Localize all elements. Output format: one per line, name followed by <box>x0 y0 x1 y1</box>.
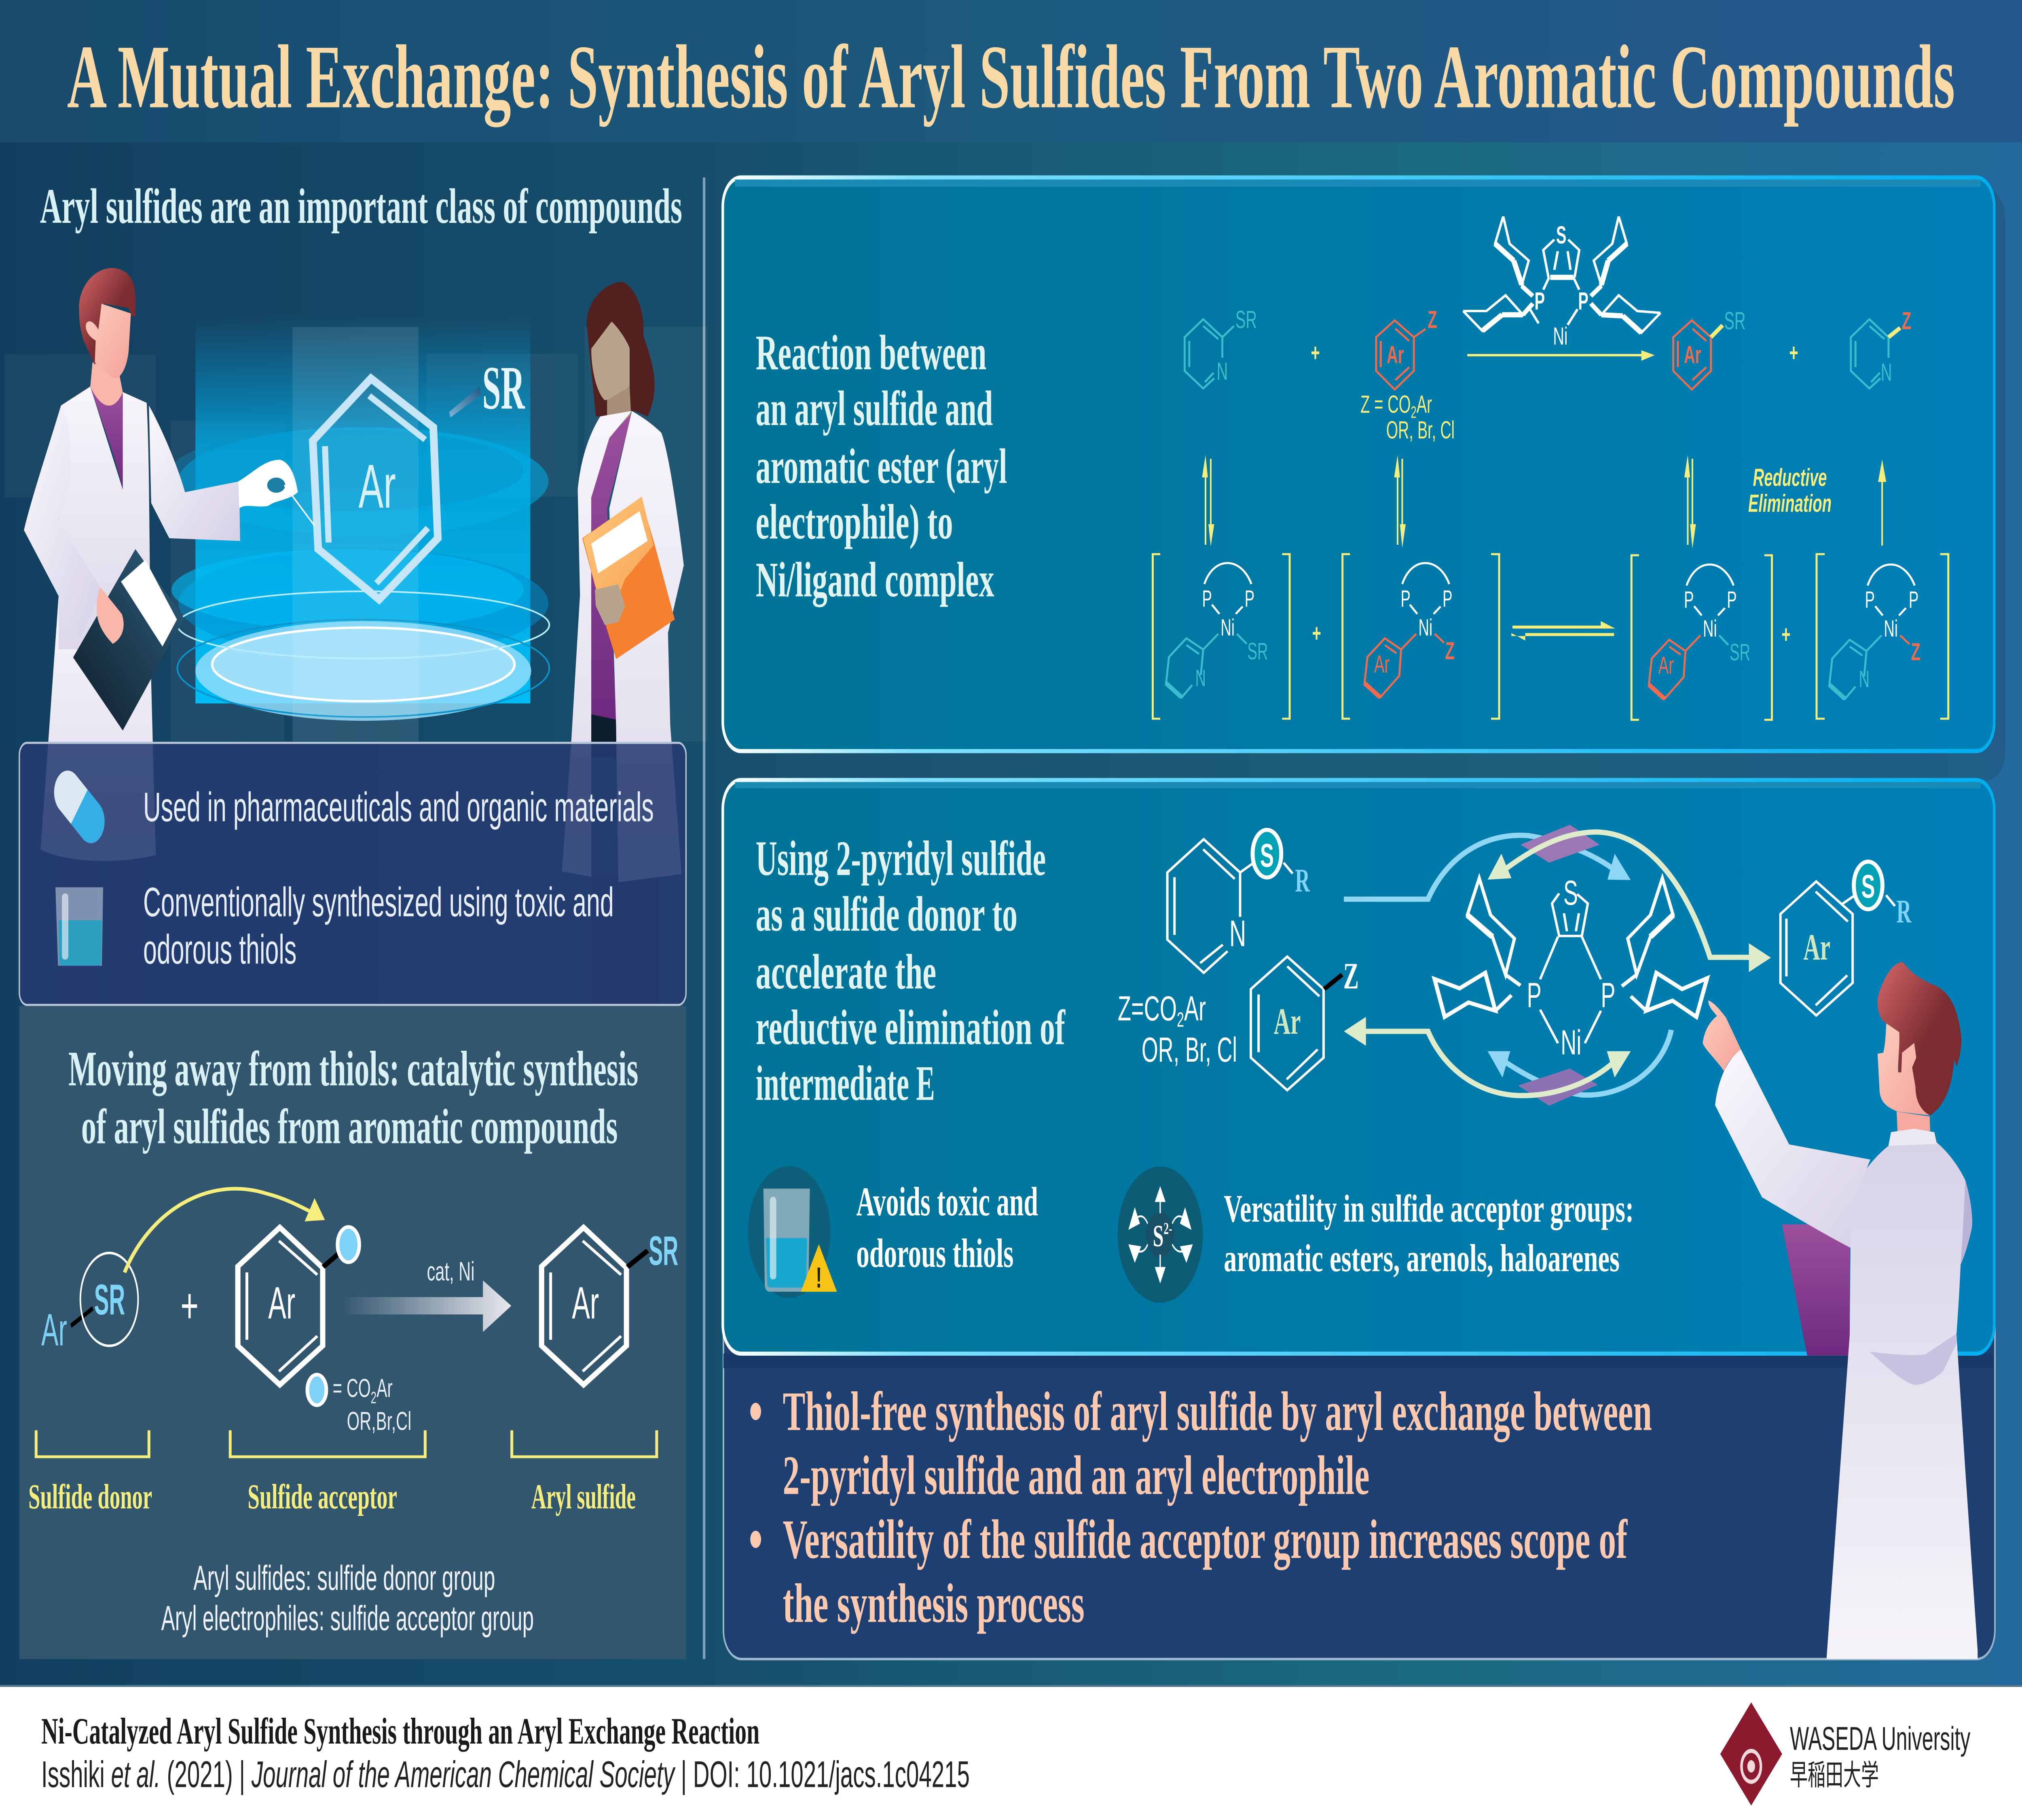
text: strategy description: intermediate E <box>756 1056 935 1111</box>
complexes: Ni intermediates with brackets: + <box>1781 620 1791 648</box>
reagent: aryl electrophile: Z <box>1428 306 1437 333</box>
text: versatility <box>1224 1187 1634 1280</box>
complexes: Ni intermediates with brackets: + <box>1312 620 1321 647</box>
figure: scientist pointing <box>1703 962 1978 1659</box>
aryl sulfide product structure: Ar <box>572 1277 599 1328</box>
catalytic exchange diagram: Ar <box>1274 1001 1301 1042</box>
arrow: catalyst reaction arrow: cat, Ni <box>427 1256 474 1286</box>
heading: Moving away from thiols: catalytic synthesis <box>68 1042 638 1096</box>
catalytic exchange diagram: Z=CO <box>1118 989 1177 1028</box>
catalytic exchange diagram: S <box>1563 874 1578 912</box>
complexes: Ni intermediates with brackets: Z <box>1911 638 1920 666</box>
reagent: aryl electrophile: Ar <box>1417 390 1432 418</box>
complexes: Ni intermediates with brackets: P <box>1727 587 1737 613</box>
icon: sulfide dianion with arrows: 2- <box>1163 1220 1172 1238</box>
arrow: forward reaction with ligand: P <box>1578 287 1588 315</box>
citation details: Isshiki et al. (2021) | Journal of the American Chemical Society | DOI: 10.1021/jacs.1c04215 <box>41 1754 970 1795</box>
catalytic exchange diagram: 2 <box>1177 1008 1184 1031</box>
labels: donor, acceptor, product: Sulfide acceptor <box>247 1477 397 1516</box>
labels: donor, acceptor, product: Sulfide donor <box>28 1477 152 1516</box>
heading: of aryl sulfides from aromatic compounds <box>81 1100 618 1154</box>
product: aryl sulfide <box>1673 307 1746 389</box>
text: reaction description <box>756 326 1007 607</box>
text: bullet one: Thiol-free synthesis of aryl sulfide by aryl exchange between <box>783 1380 1652 1442</box>
text: group definitions <box>161 1559 534 1638</box>
reagent: aryl electrophile <box>1360 306 1455 444</box>
figure: female scientist <box>562 282 684 1007</box>
complexes: Ni intermediates with brackets: Ar <box>1658 652 1674 679</box>
title: A Mutual Exchange: Synthesis of Aryl Sulfides From Two Aromatic Compounds <box>67 27 1955 127</box>
catalytic exchange diagram: P <box>1527 976 1542 1015</box>
complexes: Ni intermediates with brackets: Ni <box>1220 615 1235 641</box>
icon: beaker <box>55 887 103 966</box>
plus sign: + <box>1311 339 1320 366</box>
pyridyl sulfide structure <box>1168 830 1292 973</box>
text: conventional synthesis: Conventionally synthesized using toxic and <box>143 879 614 925</box>
text: reaction description: electrophile) to <box>756 495 953 550</box>
complexes: Ni intermediates with brackets: N <box>1859 666 1870 692</box>
complexes: Ni intermediates with brackets: P <box>1684 587 1694 613</box>
text: bullet two: Versatility of the sulfide acceptor group increases scope of <box>783 1509 1628 1570</box>
sulfide acceptor structure: Ar <box>376 1374 393 1403</box>
catalytic exchange diagram: Ar <box>1803 927 1830 968</box>
complexes: Ni intermediates with brackets: Ar <box>1374 650 1390 678</box>
catalytic exchange diagram: S <box>1861 868 1875 905</box>
reagent: aryl electrophile: 2 <box>1411 403 1417 422</box>
complexes: Ni intermediates with brackets: SR <box>1248 639 1268 665</box>
text: strategy description: as a sulfide donor to <box>756 887 1017 942</box>
icon: beaker with warning: ! <box>816 1261 822 1294</box>
complexes: Ni intermediates with brackets: P <box>1202 586 1212 612</box>
text: group definitions: Aryl sulfides: sulfide donor group <box>193 1559 495 1598</box>
aryl sulfide product <box>1781 861 1895 1016</box>
sulfide acceptor structure: Ar <box>268 1277 295 1328</box>
text: conventional synthesis: odorous thiols <box>143 927 296 973</box>
sulfide acceptor structure: = CO <box>333 1374 371 1403</box>
panel: moving away from thiols <box>19 743 686 1659</box>
heading: aryl sulfides: Aryl sulfides are an important class of compounds <box>40 179 682 234</box>
text: strategy description: Using 2-pyridyl sulfide <box>756 831 1046 886</box>
reagent: 2-pyridyl sulfide <box>1184 306 1257 388</box>
divider <box>703 178 705 1659</box>
panel shadow <box>726 190 2005 780</box>
text: bullet one <box>783 1380 1652 1506</box>
product: 2-pyridyl electrophile: Z <box>1902 307 1911 334</box>
figure: male scientist <box>24 268 315 1007</box>
catalytic exchange diagram: S <box>1260 837 1274 874</box>
catalytic exchange diagram: OR, Br, Cl <box>1142 1031 1237 1069</box>
text: reaction description: an aryl sulfide and <box>756 381 993 436</box>
illustration: lab scene with hologram <box>4 316 708 741</box>
hologram Ar label: Ar <box>358 452 396 521</box>
catalytic exchange diagram <box>1118 825 1912 1106</box>
complexes: Ni intermediates with brackets: P <box>1865 587 1875 613</box>
catalytic exchange diagram: R <box>1295 862 1310 899</box>
catalytic exchange diagram: N <box>1229 913 1246 954</box>
icon: capsule <box>49 762 110 852</box>
catalytic exchange diagram: Ni <box>1561 1023 1581 1062</box>
text: avoids thiols <box>856 1179 1038 1276</box>
product: 2-pyridyl electrophile <box>1851 307 1911 388</box>
brackets <box>36 1430 657 1457</box>
reagent: aryl electrophile: OR, Br, Cl <box>1386 416 1455 444</box>
panel: uses of aryl sulfides <box>19 743 686 1005</box>
complexes: Ni intermediates with brackets: Ni <box>1884 616 1898 642</box>
arrow: forward reaction with ligand: P <box>1535 287 1545 315</box>
aryl electrophile structure <box>1251 957 1342 1090</box>
arrow: forward reaction with ligand: S <box>1556 221 1566 249</box>
text: reaction description: Ni/ligand complex <box>756 553 994 607</box>
text: used in pharmaceuticals: Used in pharmaceuticals and organic materials <box>143 784 654 830</box>
catalytic exchange diagram: R <box>1896 893 1912 930</box>
plus sign: + <box>1789 339 1798 366</box>
sulfide acceptor structure <box>238 1227 411 1436</box>
heading <box>68 1042 638 1154</box>
arrow: forward reaction with ligand: Ni <box>1553 322 1567 350</box>
text: strategy description: accelerate the <box>756 945 936 999</box>
logo: Waseda University: WASEDA University <box>1790 1720 1970 1757</box>
text: conventional synthesis <box>143 879 614 973</box>
label: reductive elimination: Elimination <box>1748 489 1832 517</box>
label: reductive elimination: Reductive <box>1753 463 1827 491</box>
catalytic exchange diagram: Ar <box>1184 989 1206 1028</box>
arrow: yellow transfer arrow <box>125 1189 325 1272</box>
sulfide donor structure: Ar <box>41 1304 67 1355</box>
catalytic exchange diagram: P <box>1601 976 1615 1015</box>
sulfide donor structure: SR <box>94 1275 125 1324</box>
text: reaction description: Reaction between <box>756 326 986 381</box>
blue exchange arrows <box>1344 835 1671 1095</box>
text: strategy description: reductive elimination of <box>756 1001 1066 1055</box>
product: aryl sulfide: Ar <box>1684 341 1701 368</box>
logo: Waseda University <box>1720 1702 1970 1805</box>
reagent: 2-pyridyl sulfide: N <box>1217 358 1228 385</box>
title banner <box>0 0 2022 142</box>
arrows: central equilibrium <box>1511 621 1615 641</box>
icon: sulfide dianion with arrows <box>1118 1166 1203 1303</box>
complexes: Ni intermediates with brackets: P <box>1401 586 1411 612</box>
panel: summary bullets <box>723 1300 1995 1659</box>
hologram benzene ring <box>313 379 481 599</box>
arrow: forward reaction with ligand <box>1463 216 1660 361</box>
Ni ligand <box>1434 878 1707 1043</box>
product: aryl sulfide: SR <box>1724 307 1746 334</box>
reagent: aryl electrophile: Z = CO <box>1360 390 1411 418</box>
text: avoids thiols: odorous thiols <box>856 1231 1013 1276</box>
complexes: Ni intermediates with brackets: Ni <box>1419 615 1432 641</box>
complexes: Ni intermediates with brackets: Z <box>1445 637 1455 665</box>
green exchange arrows <box>1365 832 1750 1096</box>
plus sign: + <box>180 1278 199 1333</box>
aryl sulfide product structure: SR <box>649 1228 678 1274</box>
complexes: Ni intermediates with brackets: P <box>1245 586 1254 612</box>
text: group definitions: Aryl electrophiles: sulfide acceptor group <box>161 1599 534 1638</box>
text: versatility: aromatic esters, arenols, haloarenes <box>1224 1237 1620 1280</box>
panel: 2-pyridyl sulfide strategy <box>723 780 1994 1354</box>
arrow: catalyst reaction arrow <box>342 1256 511 1332</box>
text: strategy description <box>756 831 1066 1111</box>
product: 2-pyridyl electrophile: N <box>1881 358 1892 386</box>
citation title: Ni-Catalyzed Aryl Sulfide Synthesis through an Aryl Exchange Reaction <box>41 1711 759 1752</box>
text: avoids thiols: Avoids toxic and <box>856 1179 1038 1225</box>
complexes: Ni intermediates with brackets: P <box>1442 586 1453 612</box>
footer <box>0 1685 2022 1820</box>
catalytic exchange diagram: Z <box>1343 955 1359 997</box>
panel: reaction scheme <box>723 178 1994 751</box>
labels: donor, acceptor, product: Aryl sulfide <box>531 1477 636 1516</box>
hologram SR label: SR <box>482 353 525 422</box>
complexes: Ni intermediates with brackets: SR <box>1730 639 1750 666</box>
sulfide acceptor structure: OR,Br,Cl <box>347 1407 411 1436</box>
text: bullet one: 2-pyridyl sulfide and an aryl electrophile <box>783 1445 1369 1506</box>
text: bullet two: the synthesis process <box>783 1572 1085 1634</box>
sulfide donor structure <box>41 1253 138 1355</box>
complexes: Ni intermediates with brackets: N <box>1195 665 1206 692</box>
label: reductive elimination <box>1748 463 1832 517</box>
reagent: 2-pyridyl sulfide: SR <box>1235 306 1257 333</box>
logo: Waseda University: 早稲田大学 <box>1790 1759 1879 1791</box>
arrows: vertical equilibria <box>1202 455 1886 548</box>
sulfide acceptor structure: 2 <box>371 1388 376 1407</box>
text: versatility: Versatility in sulfide acceptor groups: <box>1224 1187 1634 1230</box>
icon: sulfide dianion with arrows: S <box>1153 1219 1163 1253</box>
complexes: Ni intermediates with brackets: P <box>1909 587 1918 613</box>
aryl sulfide product structure <box>541 1227 678 1385</box>
text: bullet two <box>783 1509 1628 1634</box>
text: reaction description: aromatic ester (aryl <box>756 439 1007 494</box>
bullet markers <box>750 1403 761 1548</box>
complexes: Ni intermediates with brackets <box>1153 554 1948 720</box>
icon: beaker with warning <box>748 1166 837 1298</box>
reagent: aryl electrophile: Ar <box>1387 341 1404 368</box>
labels: donor, acceptor, product <box>28 1477 636 1516</box>
complexes: Ni intermediates with brackets: Ni <box>1703 616 1717 642</box>
